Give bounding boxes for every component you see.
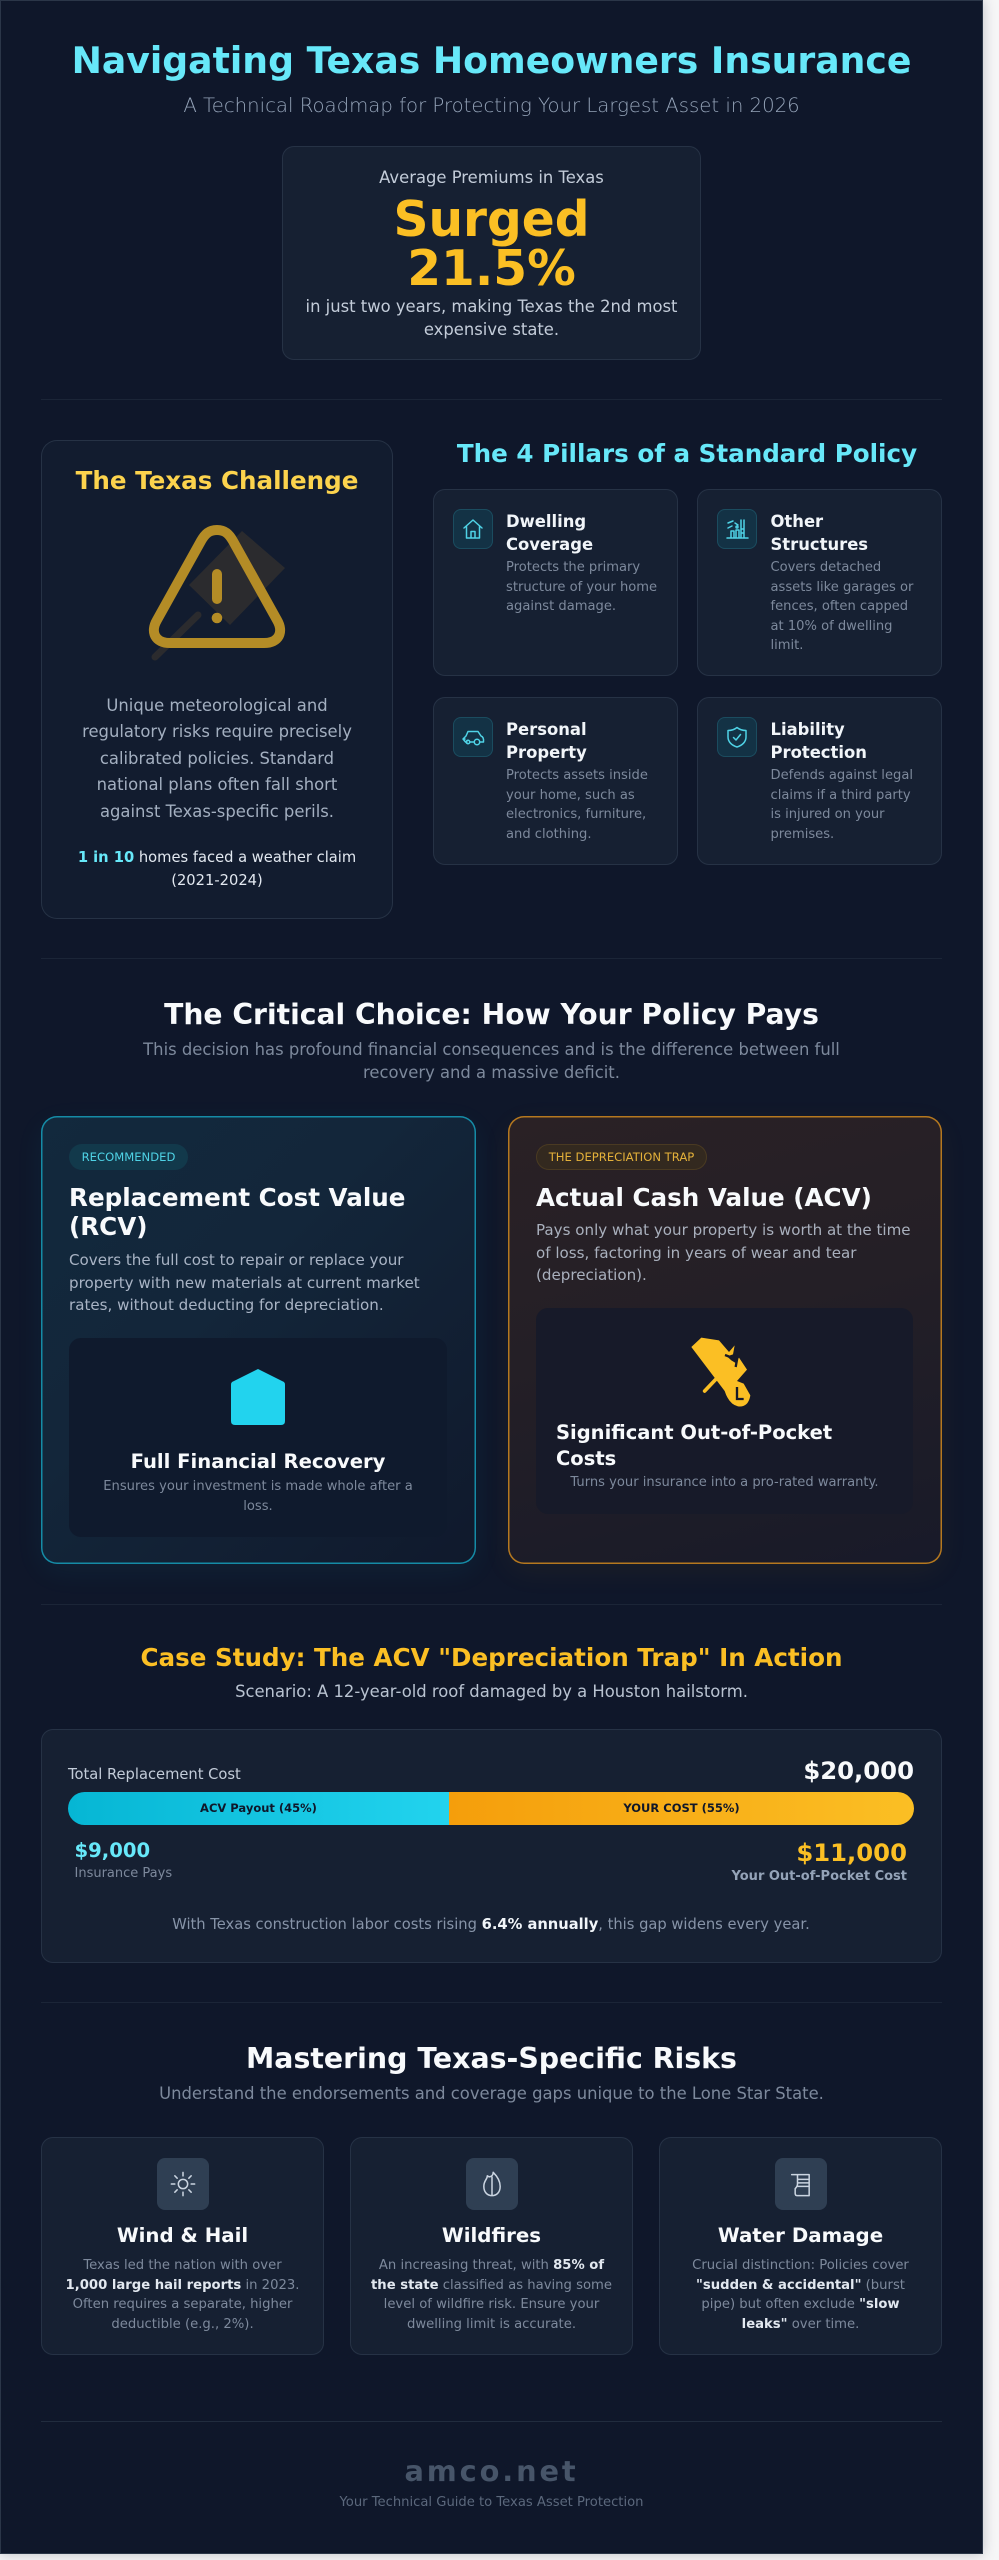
panel: wind and hail [41, 2137, 324, 2355]
pillar text: and clothing. [506, 827, 592, 842]
risk text: the state classified as having some [371, 2278, 612, 2293]
section intro: This decision has profound financial consequences and is the difference between full [143, 1040, 840, 1059]
pillar title [770, 512, 868, 554]
risk text: Often requires a separate, higher [73, 2297, 292, 2312]
option description: Covers the full cost to repair or replace your [69, 1251, 404, 1269]
outcome title: Costs [556, 1447, 616, 1470]
risk text: Crucial distinction: Policies cover [692, 2258, 909, 2273]
section intro: recovery and a massive deficit. [363, 1062, 620, 1082]
option title [69, 1182, 405, 1241]
pillar text: against damage. [506, 599, 616, 614]
outcome text: loss. [243, 1498, 273, 1514]
title: Navigating Texas Homeowners Insurance [72, 39, 911, 82]
pillar title [506, 720, 587, 762]
stat value: Surged [393, 192, 590, 248]
body text: regulatory risks require precisely [82, 722, 352, 741]
heading: critical choice: The Critical Choice: How Your Policy Pays [164, 998, 819, 1031]
option description [69, 1251, 420, 1314]
risk text: deductible (e.g., 2%). [111, 2317, 254, 2332]
risk text [371, 2258, 612, 2332]
pillar text: claims if a third party [770, 788, 911, 803]
ACV payout segment [68, 1792, 449, 1825]
risk text: level of wildfire risk. Ensure your [384, 2297, 599, 2312]
pillar title [770, 720, 867, 762]
panel: liability protection [697, 697, 942, 865]
option description: property with new materials at current market [69, 1274, 420, 1292]
note: With Texas construction labor costs rising 6.4% annually, this gap widens every year. [172, 1916, 810, 1933]
stat description: expensive state. [424, 320, 559, 338]
pillar title: Liability [770, 720, 845, 739]
your cost segment: YOUR COST (55%) [623, 1801, 740, 1815]
option description: Pays only what your property is worth at the time [536, 1221, 911, 1239]
insurance amount: $9,000 [74, 1839, 150, 1862]
outcome text [103, 1479, 413, 1514]
body text [82, 696, 352, 821]
option description [536, 1221, 911, 1284]
scenario text: Scenario: A 12-year-old roof damaged by a Houston hailstorm. [235, 1682, 748, 1701]
risk text: leaks" over time. [742, 2317, 859, 2332]
body text: against Texas-specific perils. [100, 802, 334, 821]
pillar text: fences, often capped [770, 599, 908, 614]
option description: rates, without deducting for depreciation. [69, 1296, 384, 1314]
pillar title: Other [770, 512, 823, 531]
stacked bar chart [68, 1792, 914, 1825]
insurance label: Insurance Pays [74, 1866, 172, 1881]
outcome text: Ensures your investment is made whole after a [103, 1479, 413, 1494]
your cost segment [449, 1792, 914, 1825]
total label: Total Replacement Cost [68, 1766, 241, 1783]
icon: warning triangle over gavel [148, 525, 286, 660]
weather claim stat: 1 in 10 homes faced a weather claim [78, 848, 356, 866]
option description: of loss, factoring in years of wear and tear [536, 1244, 856, 1262]
badge: RECOMMENDED [82, 1150, 175, 1164]
section intro [143, 1040, 840, 1082]
icon: house [231, 1369, 285, 1425]
icon: car [452, 717, 492, 757]
pillar text: assets like garages or [770, 580, 913, 595]
pillar title [506, 512, 593, 554]
panel: wildfires [350, 2137, 633, 2355]
stat label: Average Premiums in Texas [379, 168, 604, 187]
outcome title [556, 1421, 832, 1470]
outcome title: Full Financial Recovery [131, 1450, 385, 1473]
stat description: in just two years, making Texas the 2nd most [306, 296, 677, 316]
footer brand: amco.net [404, 2454, 579, 2488]
stat description [306, 296, 678, 338]
body text: calibrated policies. Standard [100, 749, 334, 768]
option description: (depreciation). [536, 1266, 647, 1284]
panel: water damage [659, 2137, 942, 2355]
weather claim stat [78, 848, 356, 888]
heading: The Texas Challenge [76, 466, 358, 495]
ACV payout segment: ACV Payout (45%) [200, 1801, 317, 1815]
risk title: Wind & Hail [117, 2224, 248, 2247]
stat value [393, 192, 590, 297]
icon: house [452, 509, 492, 549]
panel: replacement cost value [41, 1116, 476, 1564]
pillar text [506, 768, 648, 842]
pillar text: Defends against legal [770, 768, 913, 783]
pillar text: Covers detached [770, 560, 881, 575]
weather claim stat: (2021-2024) [171, 872, 263, 888]
pillar text [506, 560, 657, 614]
risk text [692, 2258, 909, 2332]
risk text: Texas led the nation with over [83, 2258, 282, 2273]
subtitle: A Technical Roadmap for Protecting Your Largest Asset in 2026 [183, 94, 800, 117]
pillar text: limit. [770, 638, 803, 653]
risk text: "sudden & accidental" (burst [696, 2278, 905, 2293]
panel: personal property [432, 697, 678, 865]
icon: sun [156, 2158, 208, 2210]
panel: case study chart [41, 1729, 942, 1963]
option title: Actual Cash Value (ACV) [536, 1182, 872, 1212]
pillar title: Personal [506, 720, 587, 739]
pillar text: your home, such as [506, 788, 635, 803]
risk text [66, 2258, 299, 2332]
pillar text: premises. [770, 827, 834, 842]
badge [536, 1144, 707, 1170]
outcome box [69, 1338, 447, 1537]
panel: the Texas challenge [41, 440, 393, 919]
outcome text: Turns your insurance into a pro-rated warranty. [570, 1475, 879, 1490]
risk text: pipe) but often exclude "slow [701, 2297, 900, 2312]
outcome title: Significant Out-of-Pocket [556, 1421, 832, 1444]
pillar title: Dwelling [506, 512, 586, 531]
risk title: Wildfires [442, 2224, 541, 2247]
heading: case study: Case Study: The ACV "Depreciation Trap" In Action [140, 1643, 843, 1672]
pillar text [770, 560, 914, 653]
total value: $20,000 [803, 1756, 914, 1785]
pillar text: Protects assets inside [506, 768, 648, 783]
pillar title: Structures [770, 535, 868, 554]
option title: (RCV) [69, 1212, 148, 1241]
icon: broken tool [691, 1338, 750, 1406]
section intro: Understand the endorsements and coverage gaps unique to the Lone Star State. [159, 2084, 824, 2103]
panel: dwelling coverage [432, 489, 678, 676]
pillar title: Property [506, 743, 587, 762]
body text: national plans often fall short [97, 775, 337, 794]
icon: flame [466, 2158, 518, 2210]
badge [69, 1144, 188, 1170]
icon: structures [717, 509, 757, 549]
heading: pillars: The 4 Pillars of a Standard Policy [457, 439, 917, 468]
panel: premium surge stat [282, 146, 701, 360]
risk title: Water Damage [718, 2224, 883, 2247]
pillar text: electronics, furniture, [506, 807, 646, 822]
panel: other structures [697, 489, 942, 676]
pillar text: at 10% of dwelling [770, 619, 892, 634]
footer tagline: Your Technical Guide to Texas Asset Protection [340, 2495, 643, 2510]
pillar text [770, 768, 913, 842]
out-of-pocket amount: $11,000 [796, 1838, 907, 1867]
panel: actual cash value [508, 1116, 942, 1564]
risk text: dwelling limit is accurate. [407, 2317, 576, 2332]
pillar text: structure of your home [506, 580, 657, 595]
pillar title: Protection [770, 743, 867, 762]
badge: THE DEPRECIATION TRAP [549, 1150, 694, 1164]
stat value: 21.5% [407, 241, 576, 297]
icon: shield check [717, 717, 757, 757]
pillar text: Protects the primary [506, 560, 640, 575]
risk text: An increasing threat, with 85% of [379, 2258, 604, 2273]
option title: Replacement Cost Value [69, 1182, 405, 1212]
out-of-pocket label: Your Out-of-Pocket Cost [732, 1869, 907, 1884]
icon: water document [774, 2158, 826, 2210]
pillar title: Coverage [506, 535, 593, 554]
heading: risks: Mastering Texas-Specific Risks [246, 2042, 737, 2075]
pillar text: is injured on your [770, 807, 885, 822]
risk text: 1,000 large hail reports in 2023. [66, 2278, 299, 2293]
body text: Unique meteorological and [106, 696, 328, 715]
outcome box [536, 1308, 913, 1514]
